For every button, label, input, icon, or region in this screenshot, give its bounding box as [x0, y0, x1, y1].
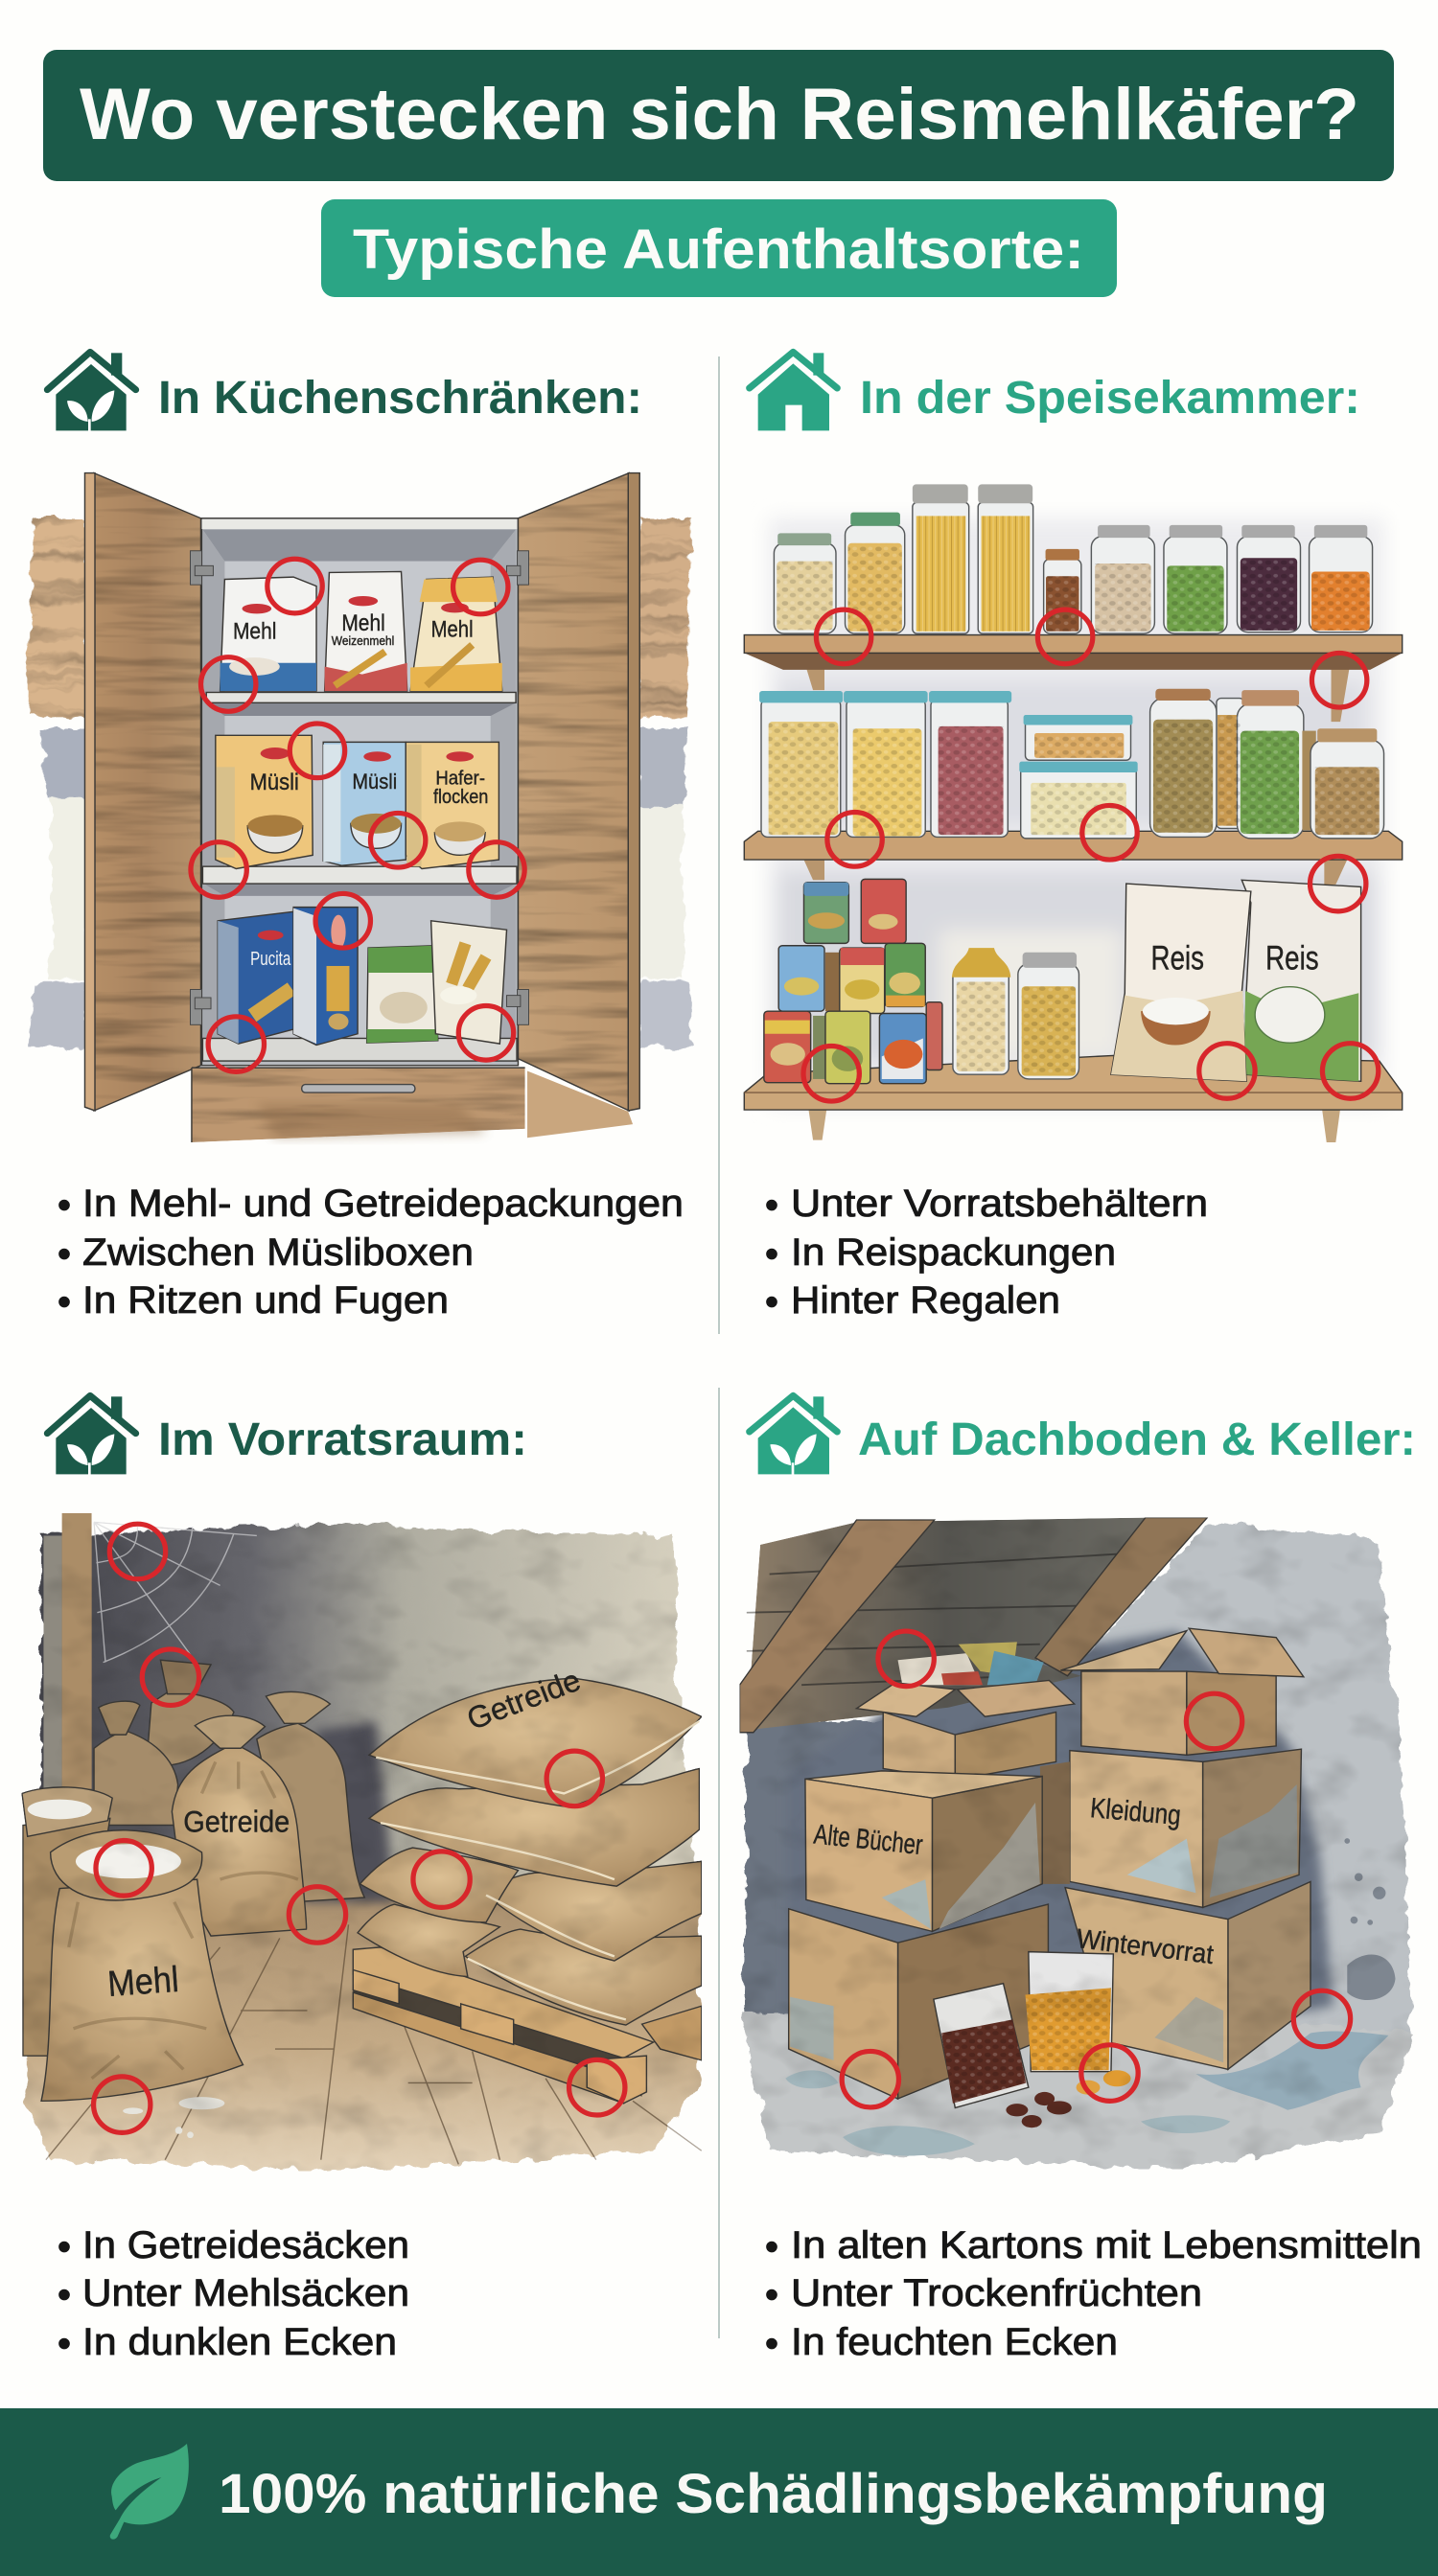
sack labelled Getreide: Getreide [183, 1806, 290, 1839]
bottom shelf packages [218, 908, 507, 1046]
bag of raisins [934, 1984, 1072, 2128]
storage jars on bottom shelf [952, 948, 1078, 1079]
stacked grain sacks: Getreide [462, 1663, 585, 1736]
middle shelf boxes: Müsli [352, 769, 397, 794]
icon: leaf [110, 2444, 189, 2540]
heading: kitchen cupboards: In Küchenschränken: [158, 373, 642, 424]
panel: storage room [22, 1395, 702, 2365]
spilled flour [123, 2097, 224, 2138]
drawer [192, 1068, 633, 1142]
title banner: Wo verstecken sich Reismehlkäfer? [80, 74, 1359, 155]
box labelled Alte Bücher: Alte Bücher [812, 1819, 924, 1861]
list: kitchen cupboards: In Ritzen und Fugen [82, 1279, 449, 1322]
sack labelled Mehl [41, 1830, 243, 2101]
middle row containers [759, 689, 1384, 839]
list: kitchen cupboards: Zwischen Müsliboxen [82, 1231, 474, 1274]
icon: teal house with leaves [750, 1395, 837, 1475]
list: pantry: In Reispackungen [791, 1231, 1116, 1274]
middle shelf boxes: flocken [433, 786, 488, 808]
stacked grain sacks [358, 1663, 702, 2025]
footer text: 100% natürliche Schädlingsbekämpfung [219, 2463, 1328, 2525]
left door [84, 473, 200, 1111]
middle shelf boxes: Hafer- [435, 767, 485, 789]
list: pantry [765, 1183, 1208, 1323]
heading: storage room: Im Vorratsraum: [158, 1414, 527, 1465]
list: kitchen cupboards: • [58, 1281, 71, 1323]
rice bags [1111, 880, 1361, 1081]
roof planks and beams [740, 1518, 1207, 1733]
list: storage room: Unter Mehlsäcken [82, 2272, 409, 2314]
list: attic and cellar: • [765, 2226, 778, 2268]
floor boards [46, 1924, 702, 2164]
illustration: pantry shelves [744, 484, 1403, 1142]
hiding spot markers [803, 610, 1379, 1101]
top shelf packages [220, 571, 502, 691]
middle shelf boxes [216, 735, 499, 869]
list: kitchen cupboards [58, 1183, 684, 1323]
pallet [353, 1947, 702, 2104]
top shelf packages: Weizenmehl [332, 633, 394, 648]
sack labelled Getreide [172, 1715, 307, 1936]
title banner [43, 50, 1394, 181]
wooden post [62, 1513, 92, 1789]
top shelf packages: Mehl [233, 618, 276, 644]
footer banner [0, 2408, 1438, 2576]
box labelled Alte Bücher [805, 1761, 1070, 1931]
heading: pantry: In der Speisekammer: [860, 373, 1360, 424]
list: pantry: Unter Vorratsbehältern [791, 1183, 1208, 1225]
box with books [856, 1642, 1075, 1780]
right door [518, 473, 639, 1111]
illustration: boxes in attic [740, 1518, 1414, 2169]
rear sacks [94, 1660, 364, 1902]
top shelf packages: Mehl [431, 617, 474, 642]
subtitle pill: Typische Aufenthaltsorte: [353, 218, 1084, 281]
list: storage room: • [58, 2274, 71, 2316]
hinges [190, 551, 528, 1024]
hiding spot markers [191, 559, 524, 1071]
water puddles [785, 2032, 1388, 2156]
list: pantry: • [765, 1233, 778, 1276]
top shelf packages: Mehl [341, 610, 385, 636]
canned food stack [764, 879, 942, 1084]
rice bags: Reis [1265, 940, 1319, 978]
panel: kitchen cupboards [27, 352, 690, 1323]
panel: attic and cellar [740, 1395, 1422, 2365]
list: kitchen cupboards: • [58, 1184, 71, 1227]
hiding spot markers [842, 1631, 1351, 2107]
list: attic and cellar: • [765, 2274, 778, 2316]
illustration: grain sacks in storage room [22, 1513, 702, 2171]
shelves [744, 635, 1403, 1142]
wall damp spots [1344, 1838, 1395, 2000]
list: pantry: • [765, 1184, 778, 1227]
list: attic and cellar: Unter Trockenfrüchten [791, 2272, 1202, 2314]
list: pantry: Hinter Regalen [791, 1279, 1060, 1322]
box labelled Wintervorrat: Wintervorrat [1075, 1923, 1216, 1970]
list: storage room: • [58, 2226, 71, 2268]
bag of dried apricots [1026, 1952, 1131, 2095]
heading: attic and cellar: Auf Dachboden & Keller: [858, 1414, 1416, 1465]
subtitle pill [321, 199, 1117, 297]
open box on the right [1060, 1628, 1304, 1755]
icon: dark house with leaves [47, 1395, 136, 1475]
list: pantry: • [765, 1281, 778, 1323]
cupboard interior [201, 518, 518, 1066]
list: kitchen cupboards: • [58, 1233, 71, 1276]
list: storage room: In Getreidesäcken [82, 2224, 409, 2266]
left open sack [22, 1787, 112, 2056]
icon: dark house with leaves [47, 352, 136, 431]
list: storage room: • [58, 2323, 71, 2365]
cobweb [94, 1522, 257, 1663]
icon: teal house [750, 352, 837, 430]
list: attic and cellar: In feuchten Ecken [791, 2321, 1118, 2363]
bottom shelf packages: Pucita [250, 948, 291, 970]
box labelled Wintervorrat [1065, 1881, 1310, 2069]
top row jars [774, 484, 1373, 633]
middle shelf boxes: Müsli [250, 770, 299, 795]
box labelled Kleidung: Kleidung [1089, 1792, 1182, 1831]
sack labelled Mehl: Mehl [106, 1960, 180, 2005]
list: storage room [58, 2224, 409, 2365]
illustration: open kitchen cupboard [27, 473, 690, 1142]
hiding spot markers [94, 1524, 625, 2132]
panel: pantry [744, 352, 1403, 1323]
list: attic and cellar: • [765, 2323, 778, 2365]
list: kitchen cupboards: In Mehl- und Getreidepackungen [82, 1183, 684, 1225]
rice bags: Reis [1151, 940, 1204, 978]
list: attic and cellar: In alten Kartons mit Lebensmitteln [791, 2224, 1422, 2266]
box labelled Kleidung [1070, 1749, 1301, 1907]
list: storage room: In dunklen Ecken [82, 2321, 397, 2363]
list: attic and cellar [765, 2224, 1422, 2365]
bottom left box [789, 1904, 1048, 2099]
